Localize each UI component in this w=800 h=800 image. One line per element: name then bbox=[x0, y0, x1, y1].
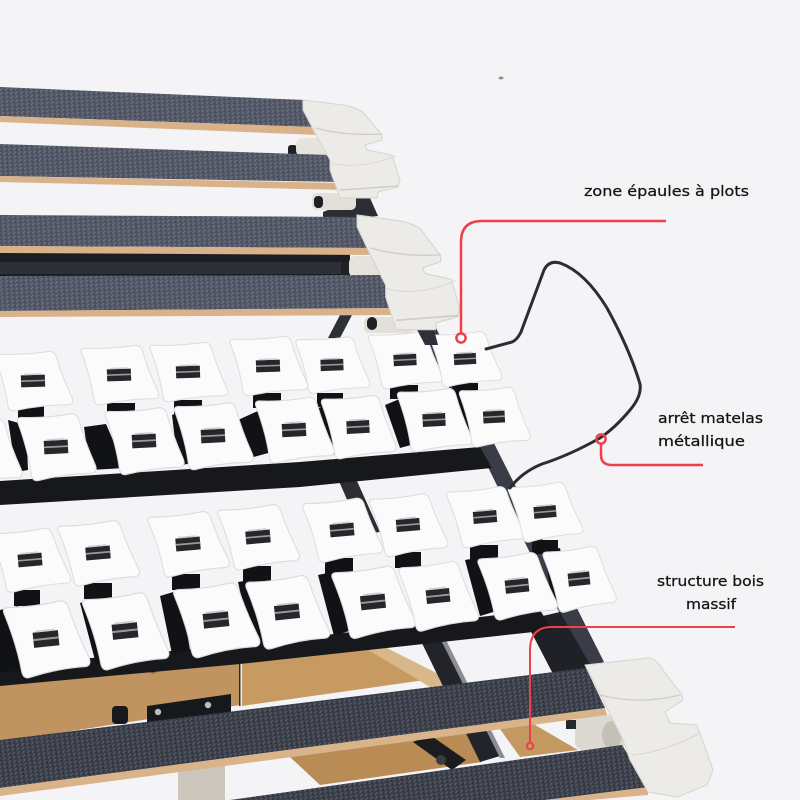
metal mattress stop bbox=[486, 262, 640, 488]
label: arrêt matelas métallique: métallique bbox=[658, 434, 745, 450]
plots row 1 bbox=[0, 330, 502, 411]
end clip upper pair bbox=[303, 100, 400, 198]
slat 5 bbox=[0, 668, 607, 796]
mounting bracket bbox=[112, 694, 231, 726]
label: structure bois massif bbox=[657, 574, 764, 613]
crossbar upper bbox=[0, 447, 492, 505]
steel rails bbox=[0, 198, 604, 762]
lower bracket bbox=[413, 735, 466, 770]
callout line: zone épaules bbox=[456, 221, 666, 343]
plots row 4 bbox=[3, 544, 617, 680]
label: structure bois massif: massif bbox=[686, 597, 737, 613]
spring supports bbox=[0, 383, 570, 672]
end clip lower pair bbox=[357, 215, 460, 330]
slat 1 bbox=[0, 87, 318, 135]
front roller bbox=[566, 715, 625, 750]
roller joints upper bbox=[288, 138, 438, 345]
plots row 2 bbox=[0, 386, 531, 486]
slat 2 bbox=[0, 144, 344, 190]
metal leg bbox=[178, 765, 225, 800]
label: structure bois massif: structure bois bbox=[657, 574, 764, 590]
slat 6 bbox=[230, 745, 648, 800]
crossbar lower bbox=[0, 610, 552, 686]
slat 3 bbox=[0, 215, 374, 255]
callout line: arrêt matelas bbox=[596, 434, 703, 465]
solid wood frame bbox=[0, 642, 578, 785]
end clip bottom bbox=[585, 658, 713, 797]
callout line: structure bois bbox=[527, 627, 735, 749]
plots row 3 bbox=[0, 481, 584, 594]
label: arrêt matelas métallique: arrêt matelas bbox=[658, 411, 763, 427]
label: zone épaules à plots: zone épaules à plots bbox=[584, 184, 749, 200]
slat 4 bbox=[0, 275, 402, 317]
label: arrêt matelas métallique bbox=[658, 411, 763, 450]
